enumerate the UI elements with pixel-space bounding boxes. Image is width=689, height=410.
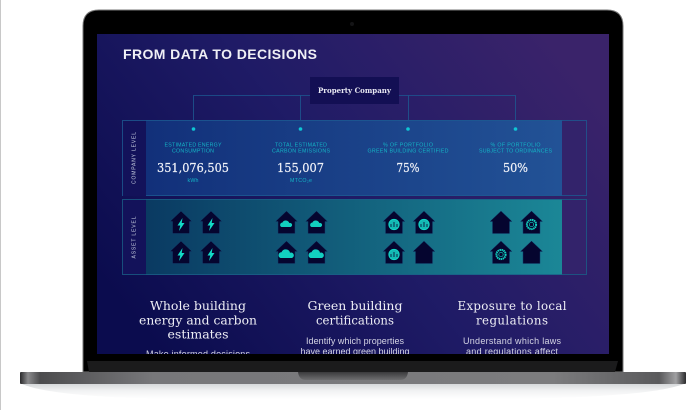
asset level band — [122, 199, 586, 275]
property company box: Property Company — [318, 86, 392, 95]
column: whole building energy: energy and carbon — [139, 313, 257, 327]
certification houses — [383, 211, 435, 264]
metric: certified: 75% — [396, 161, 420, 175]
metric: certified — [368, 127, 449, 175]
connector lines — [193, 95, 516, 120]
column: whole building energy — [140, 301, 257, 354]
column: whole building energy: Make informed decisions — [146, 349, 250, 359]
property company box — [310, 77, 399, 104]
metric: energy: 351,076,505 — [157, 161, 229, 175]
metric: ordinances — [479, 127, 552, 175]
screen chin — [87, 361, 618, 372]
metric: ordinances: 50% — [503, 161, 528, 175]
column: exposure to local regulations: and regulations affect — [466, 346, 558, 356]
metric: carbon — [272, 127, 330, 184]
metric: energy: CONSUMPTION — [172, 149, 214, 155]
column: green building certifications — [300, 299, 410, 356]
column: exposure to local regulations: Understand which laws — [463, 336, 562, 346]
metric: energy — [157, 127, 229, 184]
column: green building certifications: have earned green building — [300, 346, 410, 356]
webcam — [350, 22, 354, 26]
base notch — [298, 372, 408, 380]
metric: ordinances: SUBJECT TO ORDINANCES — [479, 149, 552, 155]
laptop base — [20, 372, 686, 384]
column: green building certifications: certifications — [316, 313, 394, 327]
metric: carbon: TOTAL ESTIMATED — [275, 142, 327, 148]
company level band — [122, 120, 586, 196]
column: green building certifications: Identify which properties — [306, 336, 404, 346]
carbon houses — [276, 211, 328, 264]
metric: ordinances: % OF PORTFOLIO — [490, 142, 540, 148]
metric: carbon: 155,007 — [277, 161, 324, 175]
title: FROM DATA TO DECISIONS — [123, 46, 317, 62]
column: exposure to local regulations — [458, 299, 567, 356]
column: green building certifications: Green building — [308, 299, 403, 313]
column: exposure to local regulations: Exposure to local — [458, 299, 567, 313]
laptop base shadow — [22, 384, 684, 399]
metric: energy: ESTIMATED ENERGY — [164, 142, 222, 148]
asset level label: ASSET LEVEL — [132, 216, 138, 258]
laptop lid bezel — [83, 10, 623, 372]
metric: carbon: CARBON EMISSIONS — [272, 149, 330, 155]
page edge line — [0, 0, 1, 410]
column: whole building energy: estimates — [168, 327, 228, 341]
ordinance houses — [490, 211, 542, 264]
column: whole building energy: Whole building — [150, 299, 246, 313]
screen — [97, 34, 609, 359]
metric: certified: GREEN BUILDING CERTIFIED — [368, 149, 449, 155]
metric: certified: % OF PORTFOLIO — [383, 142, 433, 148]
company level label: COMPANY LEVEL — [132, 132, 138, 184]
energy houses — [170, 211, 222, 264]
screen background — [97, 34, 609, 354]
column: exposure to local regulations: regulations — [476, 313, 548, 327]
metric: energy: kWh — [188, 178, 199, 184]
metric: carbon: MTCO₂e — [290, 178, 312, 184]
